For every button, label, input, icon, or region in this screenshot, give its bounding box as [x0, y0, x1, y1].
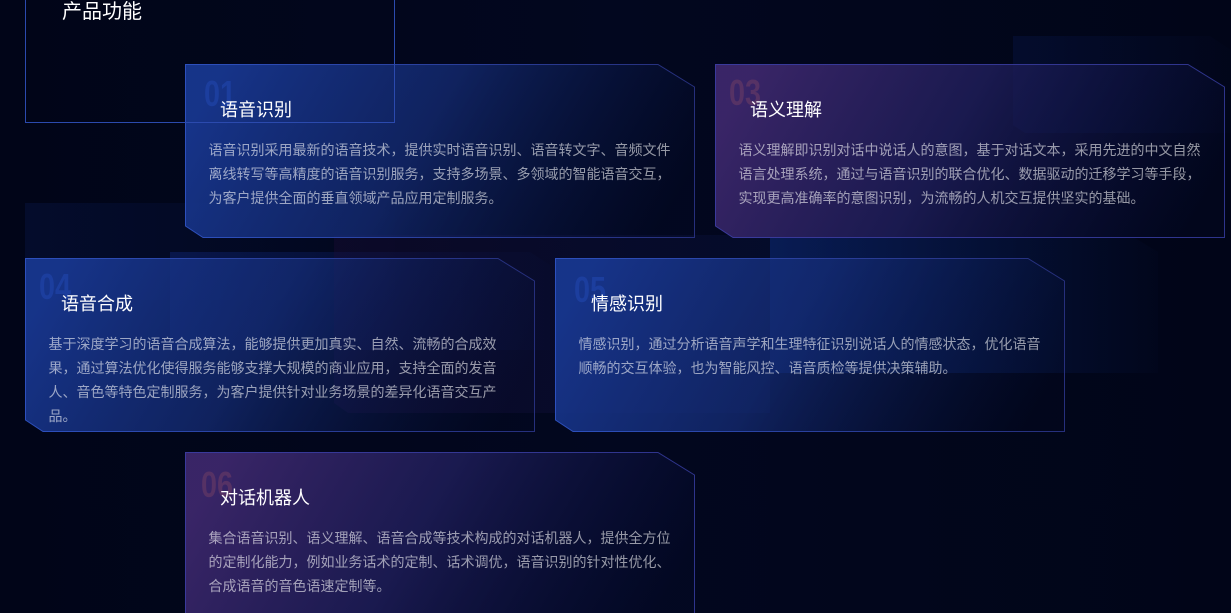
title: 语音合成 — [61, 294, 133, 314]
number 04: 04 — [39, 266, 71, 307]
description: 情感识别，通过分析语音声学和生理特征识别说话人的情感状态，优化语音 — [578, 336, 1040, 352]
number 05: 05 — [574, 269, 606, 310]
description: 实现更高准确率的意图识别，为流畅的人机交互提供坚实的基础。 — [738, 190, 1144, 206]
description: 果，通过算法优化使得服务能够支撑大规模的商业应用，支持全面的发音 — [48, 360, 496, 376]
number 03: 03 — [729, 72, 761, 113]
description: 顺畅的交互体验，也为智能风控、语音质检等提供决策辅助。 — [578, 360, 956, 376]
heading text: 产品功能 — [62, 1, 142, 23]
number 01: 01 — [204, 73, 236, 114]
description — [208, 530, 670, 594]
card 01: 语音识别 — [185, 64, 695, 238]
heading box: 产品功能 — [25, 0, 395, 123]
description: 语言处理系统，通过与语音识别的联合优化、数据驱动的迁移学习等手段， — [738, 166, 1200, 182]
description: 为客户提供全面的垂直领域产品应用定制服务。 — [208, 190, 502, 206]
description: 的定制化能力，例如业务话术的定制、话术调优，语音识别的针对性优化、 — [208, 554, 670, 570]
description: 集合语音识别、语义理解、语音合成等技术构成的对话机器人，提供全方位 — [208, 530, 670, 546]
title: 语音识别 — [220, 100, 292, 120]
description — [578, 336, 1040, 376]
card 06: 对话机器人 — [185, 452, 695, 613]
title: 语义理解 — [750, 100, 822, 120]
title: 情感识别 — [591, 294, 663, 314]
title: 对话机器人 — [220, 488, 310, 508]
card 05: 情感识别 — [555, 258, 1065, 432]
description: 语音识别采用最新的语音技术，提供实时语音识别、语音转文字、音频文件 — [208, 142, 670, 158]
description: 合成语音的音色语速定制等。 — [208, 578, 390, 594]
description: 人、音色等特色定制服务，为客户提供针对业务场景的差异化语音交互产 — [48, 384, 496, 400]
card 04: 语音合成 — [25, 258, 535, 432]
description — [208, 142, 670, 206]
description: 语义理解即识别对话中说话人的意图，基于对话文本，采用先进的中文自然 — [738, 142, 1200, 158]
description: 离线转写等高精度的语音识别服务，支持多场景、多领域的智能语音交互， — [208, 166, 670, 182]
description — [738, 142, 1200, 206]
description: 品。 — [48, 408, 76, 424]
description — [48, 336, 496, 424]
description: 基于深度学习的语音合成算法，能够提供更加真实、自然、流畅的合成效 — [48, 336, 496, 352]
card 03: 语义理解 — [715, 64, 1225, 238]
number 06: 06 — [201, 464, 233, 505]
